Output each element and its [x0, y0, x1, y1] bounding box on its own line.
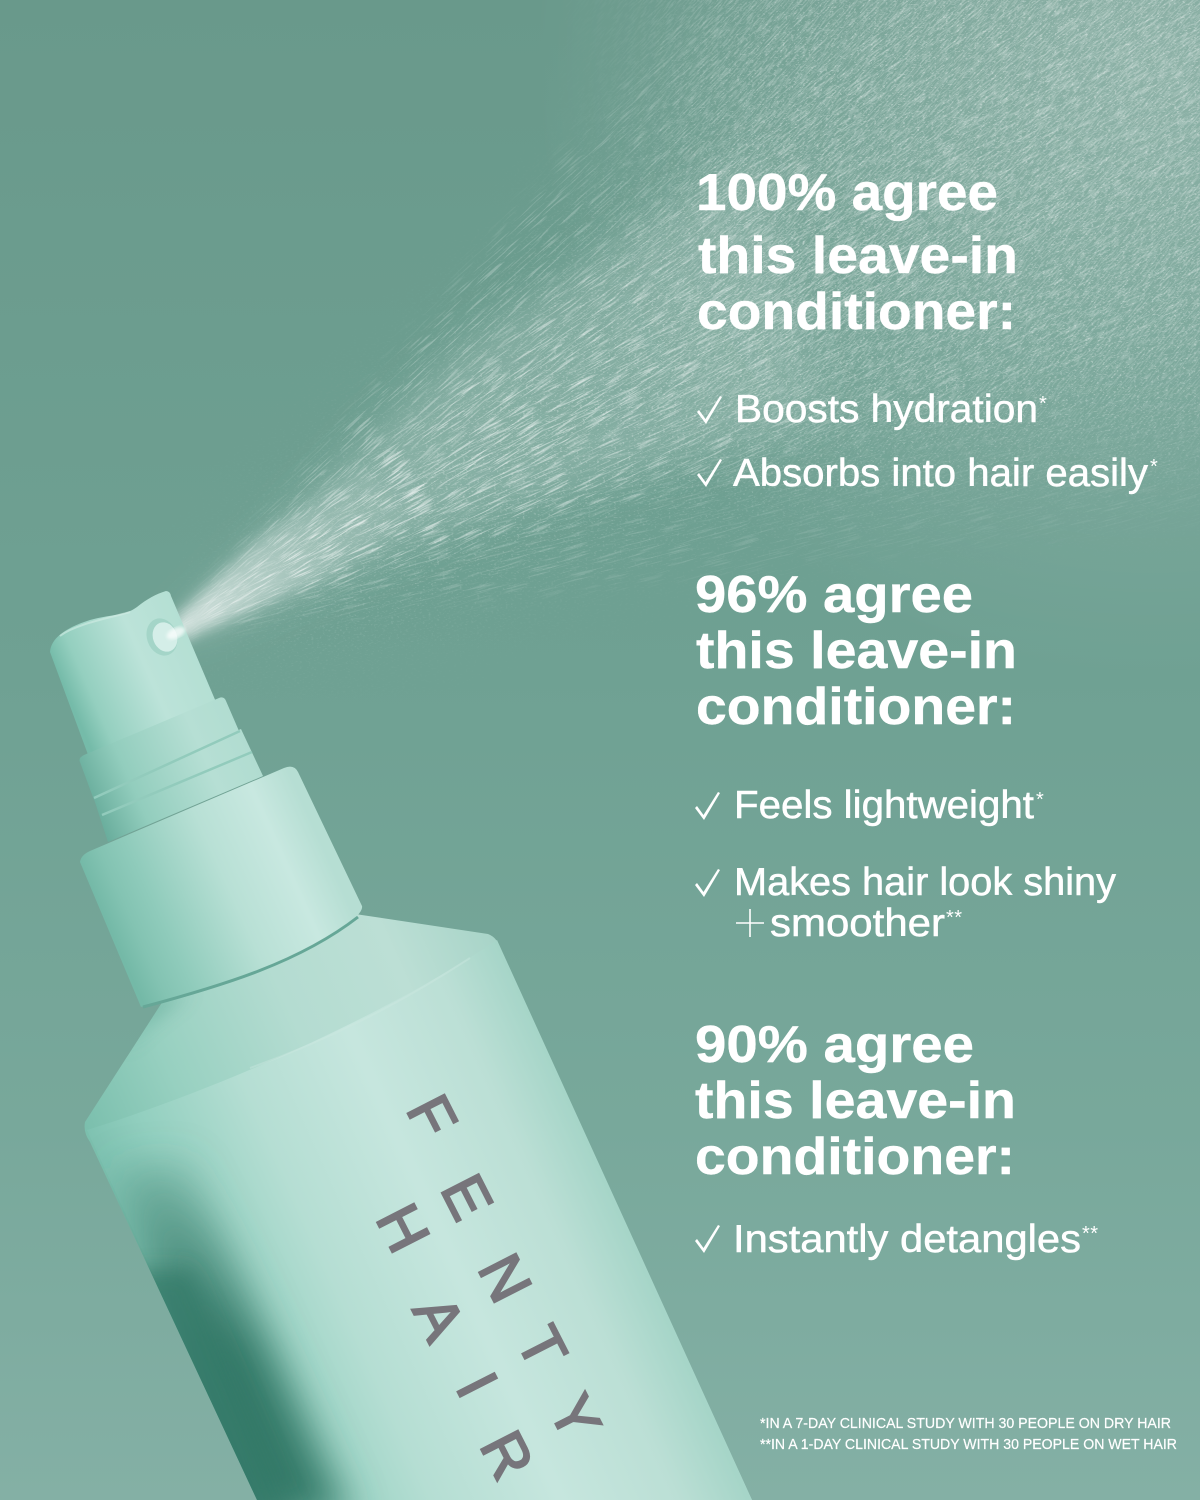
collar ring upper	[80, 697, 239, 800]
heading: 96% agree	[695, 566, 973, 624]
spray mist	[175, 0, 1200, 653]
dense spray core	[172, 470, 430, 644]
logo: FENTY HAIR: F	[394, 1084, 470, 1148]
logo: FENTY HAIR: R	[467, 1420, 547, 1490]
mid spray haze	[175, 150, 820, 642]
logo: FENTY HAIR: T	[504, 1315, 580, 1379]
heading	[695, 566, 1017, 736]
item: feels lightweight: *	[1036, 789, 1044, 811]
cap	[80, 767, 362, 1007]
text column	[695, 164, 1177, 1453]
logo: FENTY HAIR: I	[443, 1362, 511, 1408]
heading: conditioner:	[696, 678, 1016, 736]
footnotes: **IN A 1-DAY CLINICAL STUDY WITH 30 PEOPLE ON WET HAIR	[760, 1437, 1177, 1453]
heading	[696, 164, 1018, 341]
heading: 100% agree	[696, 164, 998, 222]
item: makes hair look shiny + smoother: Makes hair look shiny	[734, 861, 1117, 904]
heading	[695, 1016, 1016, 1186]
heading: conditioner:	[695, 1128, 1015, 1186]
logo: FENTY HAIR: N	[465, 1243, 545, 1313]
item: makes hair look shiny + smoother	[695, 861, 1117, 945]
logo: FENTY HAIR	[363, 1084, 614, 1490]
heading: this leave-in	[698, 227, 1018, 285]
shoulder edge highlight	[250, 958, 470, 1068]
section: 100% agree	[696, 164, 1158, 495]
pump top edge highlight	[60, 612, 130, 636]
body side shadow	[115, 990, 350, 1500]
heading: this leave-in	[695, 1072, 1016, 1130]
item: boosts hydration: Boosts hydration	[735, 388, 1038, 431]
item: absorbs into hair easily: Absorbs into hair easily	[733, 452, 1149, 495]
collar groove	[94, 731, 252, 815]
pump head	[50, 591, 216, 760]
item: boosts hydration: *	[1039, 393, 1047, 415]
item: instantly detangles: Instantly detangles	[733, 1218, 1081, 1261]
bottle body shoulder	[85, 914, 752, 1500]
logo: FENTY HAIR: E	[428, 1164, 506, 1230]
heading: this leave-in	[696, 622, 1017, 680]
item: feels lightweight: Feels lightweight	[734, 784, 1034, 827]
section: 96% agree	[695, 566, 1117, 945]
item: makes hair look shiny + smoother: smoother	[770, 902, 945, 945]
nozzle	[141, 614, 187, 660]
section: 90% agree	[695, 1016, 1098, 1261]
far mist texture	[626, 0, 1200, 462]
logo: FENTY HAIR: H	[363, 1193, 443, 1263]
spray streak fan	[185, 0, 1200, 634]
heading: conditioner:	[697, 283, 1016, 341]
collar ring lower	[92, 729, 263, 842]
item: makes hair look shiny + smoother: **	[946, 907, 962, 929]
item: instantly detangles: **	[1082, 1223, 1098, 1245]
bottle	[50, 591, 752, 1500]
footnotes	[760, 1416, 1177, 1453]
fine droplets	[254, 0, 1200, 653]
footnotes: *IN A 7-DAY CLINICAL STUDY WITH 30 PEOPLE ON DRY HAIR	[760, 1416, 1171, 1432]
cap rim shadow	[143, 917, 358, 1007]
bottle body cylinder	[87, 940, 752, 1500]
item: absorbs into hair easily: *	[1150, 456, 1158, 478]
logo: FENTY HAIR: Y	[536, 1384, 614, 1450]
heading: 90% agree	[695, 1016, 974, 1074]
logo: FENTY HAIR: A	[400, 1285, 478, 1351]
far mist haze	[450, 0, 1200, 680]
